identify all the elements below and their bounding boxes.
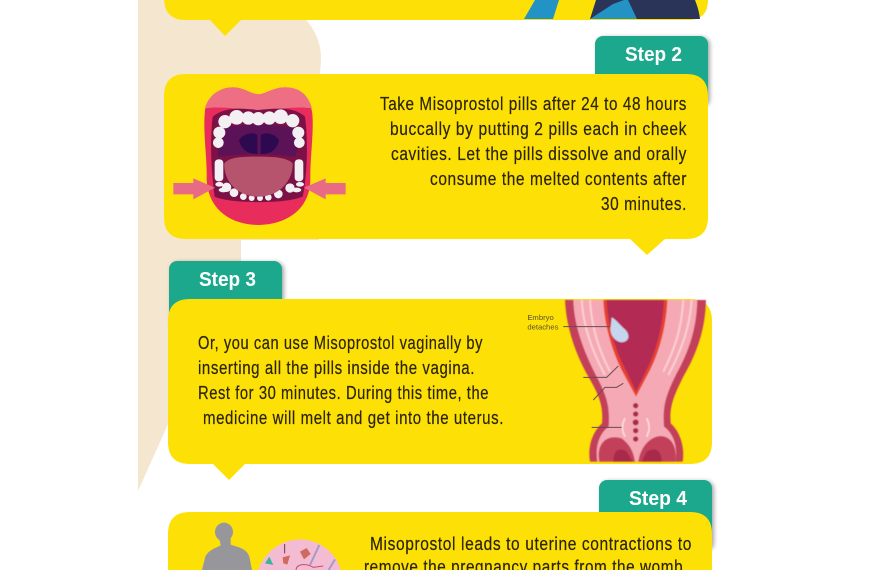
step 4 text — [364, 534, 692, 570]
silhouette with magnified womb illustration — [202, 523, 341, 570]
upper and lower teeth — [213, 109, 305, 201]
step 2 text: buccally by putting 2 pills each in cheek — [390, 119, 687, 139]
step 3 text: medicine will melt and get into the uterus. — [203, 408, 504, 428]
step 3 text: Rest for 30 minutes. During this time, the — [198, 383, 489, 403]
step 4 tab — [599, 480, 712, 550]
icon: open mouth with arrows — [173, 87, 346, 225]
step 2 text: consume the melted contents after — [430, 169, 687, 189]
panel: step 2 — [164, 36, 708, 255]
panel: step 3 — [168, 261, 712, 480]
beige background shape — [138, 0, 321, 491]
step 3 text: inserting all the pills inside the vagina. — [198, 358, 475, 378]
panel: step 4 — [168, 480, 712, 570]
step 1 illustration fragment — [524, 0, 700, 19]
step 3 text — [198, 333, 504, 428]
step 4 text: Misoprostol leads to uterine contractions to — [370, 534, 692, 554]
step 2 tab — [595, 36, 708, 106]
step 4 tab: Step 4 — [629, 488, 688, 510]
label: embryo detaches: Embryo — [527, 313, 554, 322]
step 1 callout box — [164, 0, 708, 36]
step 2 text: cavities. Let the pills dissolve and orally — [391, 144, 687, 164]
step 3 callout box — [168, 299, 712, 480]
step 2 text: 30 minutes. — [601, 194, 687, 214]
step 2 callout box — [164, 74, 708, 255]
step 3 tab — [169, 261, 282, 331]
step 2 text: Take Misoprostol pills after 24 to 48 hours — [380, 94, 687, 114]
step 2 tab: Step 2 — [625, 44, 682, 66]
step 4 callout box — [168, 512, 712, 570]
label: embryo detaches: detaches — [527, 322, 559, 331]
step 2 text — [380, 94, 687, 214]
panel: step 1 — [164, 0, 708, 36]
step 3 tab: Step 3 — [199, 269, 256, 291]
uterus illustration — [527, 300, 706, 462]
step 3 text: Or, you can use Misoprostol vaginally by — [198, 333, 483, 353]
